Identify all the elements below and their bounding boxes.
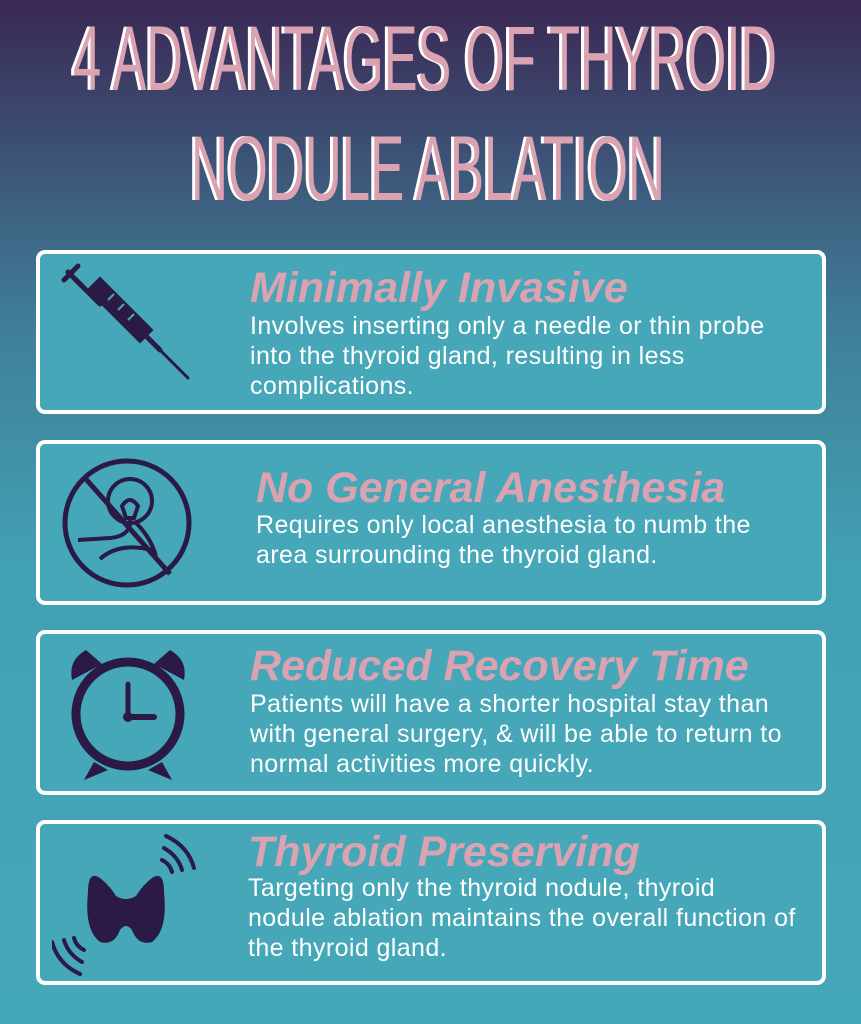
- text: [250, 312, 765, 400]
- heading: Thyroid Preserving: [248, 828, 640, 876]
- title: [70, 8, 777, 220]
- text: with general surgery, & will be able to return to: [250, 720, 782, 748]
- text: Involves inserting only a needle or thin probe: [250, 312, 765, 340]
- icon: thyroid: [52, 834, 196, 976]
- text: nodule ablation maintains the overall function of: [248, 904, 796, 932]
- heading: Reduced Recovery Time: [250, 642, 749, 690]
- text: into the thyroid gland, resulting in less: [250, 342, 685, 370]
- text: Requires only local anesthesia to numb the: [256, 511, 751, 539]
- panel: thyroid preserving: [36, 820, 826, 985]
- text: [248, 874, 796, 962]
- panel: reduced recovery time: [36, 630, 826, 795]
- text: Patients will have a shorter hospital stay than: [250, 690, 769, 718]
- text: the thyroid gland.: [248, 934, 447, 962]
- panel: minimally invasive: [36, 250, 826, 414]
- heading: Minimally Invasive: [250, 264, 628, 312]
- text: normal activities more quickly.: [250, 750, 594, 778]
- text: [256, 511, 751, 569]
- icon: no anesthesia: [62, 458, 192, 588]
- icon: syringe: [62, 264, 190, 380]
- text: area surrounding the thyroid gland.: [256, 541, 658, 569]
- panel: no general anesthesia: [36, 440, 826, 605]
- icon: alarm clock: [71, 650, 185, 780]
- text: Targeting only the thyroid nodule, thyroid: [248, 874, 715, 902]
- text: [250, 690, 782, 778]
- text: complications.: [250, 372, 414, 400]
- heading: No General Anesthesia: [256, 464, 725, 512]
